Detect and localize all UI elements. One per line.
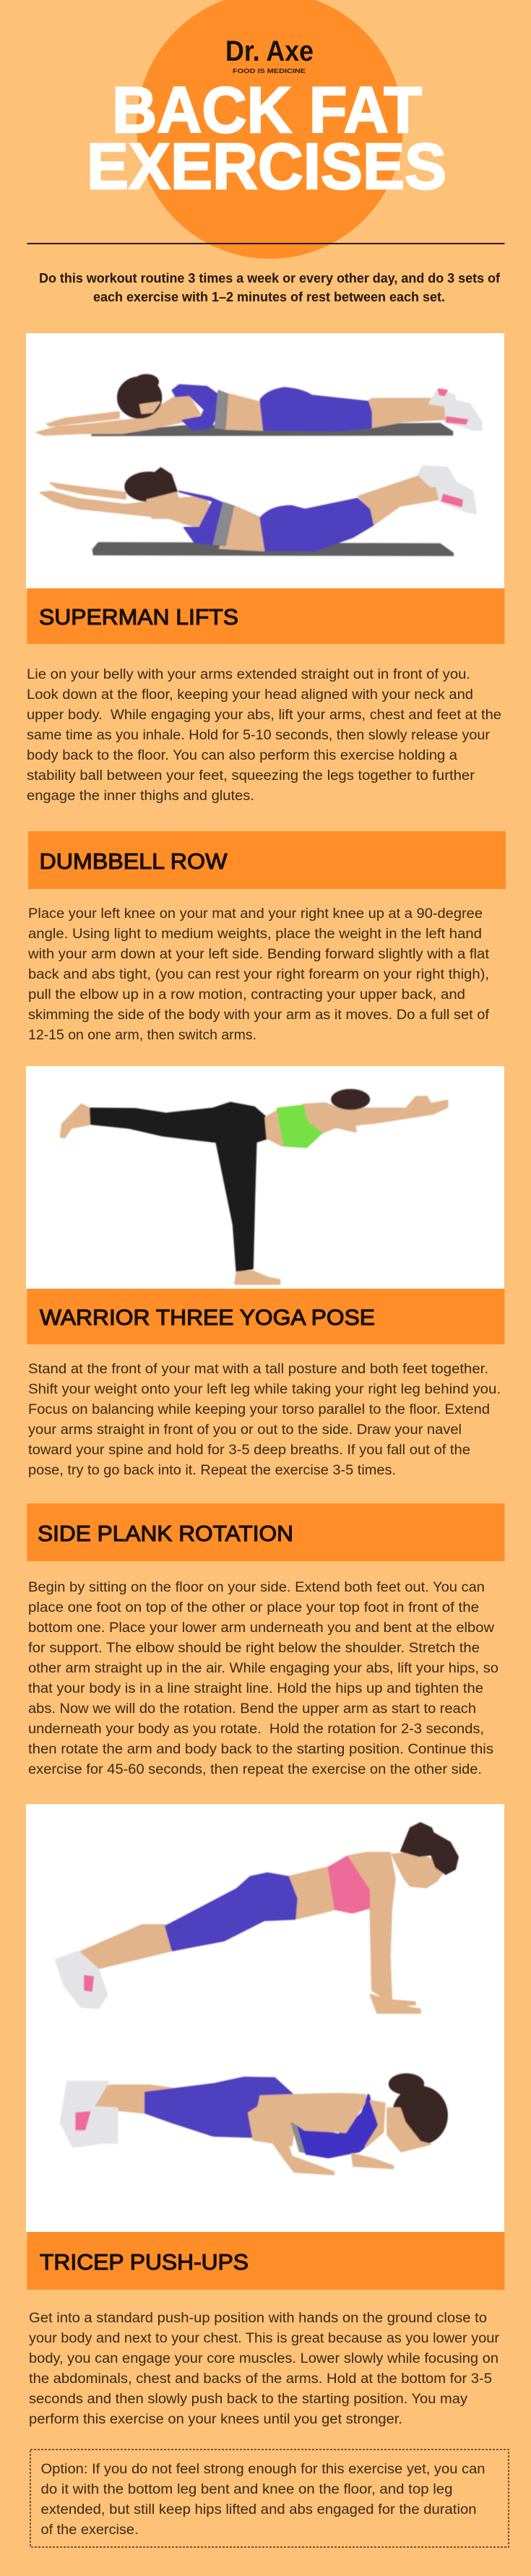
callout: option box: of the exercise.: [40, 2523, 139, 2538]
photo panel: warrior three: [26, 1066, 504, 1289]
callout: option box: do it with the bottom leg bent and knee on the floor, and top leg: [40, 2482, 452, 2497]
panel: side plank rotation: [27, 1503, 504, 1777]
text block: dumbbell row: [27, 906, 490, 1043]
text block: tricep push-ups: seconds and then slowly push back to the starting position. You may: [29, 2392, 468, 2407]
text block: side plank rotation: other arm straight up in the air. While engaging your abs, lift your hips, so: [28, 1661, 498, 1676]
heading banner: superman lifts: SUPERMAN LIFTS: [39, 604, 238, 630]
panel: warrior three yoga pose: [26, 1066, 504, 1478]
text block: side plank rotation: underneath your body as you rotate. Hold the rotation for 2-3 seconds,: [28, 1722, 484, 1737]
text block: side plank rotation: bottom one. Place your lower arm underneath you and bent at the elbow: [28, 1620, 494, 1636]
text block: warrior three: Shift your weight onto your left leg while taking your right leg behind you.: [28, 1382, 501, 1397]
figure: lying flat on mat: [38, 374, 481, 436]
text block: superman lifts: engage the inner thighs and glutes.: [27, 789, 254, 804]
text block: side plank rotation: that your body is in a line straight line. Hold the hips up and tighten the: [28, 1681, 483, 1696]
text block: warrior three: pose, try to go back into it. Repeat the exercise 3-5 times.: [28, 1463, 396, 1478]
text block: side plank rotation: abs. Now we will do the rotation. Bend the upper arm as start to reach: [28, 1701, 476, 1717]
header: logo, title and intro: [27, 0, 504, 304]
callout: option box: Option: If you do not feel strong enough for this exercise yet, you can: [40, 2462, 485, 2477]
heading banner: dumbbell row: DUMBBELL ROW: [39, 849, 228, 874]
figure: push-up top position: [56, 1823, 458, 2013]
callout: option box: extended, but still keep hips lifted and abs engaged for the duration: [40, 2502, 477, 2517]
text block: warrior three: Stand at the front of your mat with a tall posture and both feet together.: [28, 1362, 488, 1377]
heading banner: warrior three: WARRIOR THREE YOGA POSE: [40, 1305, 375, 1330]
text block: dumbbell row: angle. Using light to medium weights, place the weight in the left hand: [28, 927, 482, 942]
text block: tricep push-ups: body, you can engage your core muscles. Lower slowly while focusing on: [29, 2351, 498, 2366]
text block: side plank rotation: then rotate the arm and body back to the starting position. Continue this: [28, 1742, 493, 1757]
panel: superman lifts: [26, 333, 504, 804]
heading banner: tricep push-ups: [27, 2232, 504, 2290]
title: EXERCISES: [87, 131, 446, 203]
text block: dumbbell row: pull the elbow up in a row motion, contracting your upper back, and: [28, 987, 465, 1003]
logo: Dr. Axe: FOOD IS MEDICINE: [233, 67, 306, 74]
text block: dumbbell row: skimming the side of the body with your arm as it moves. Do a full set of: [28, 1008, 490, 1023]
orange circle behind title: [137, 0, 403, 259]
text block: side plank rotation: Begin by sitting on the floor on your side. Extend both feet out. You can: [28, 1580, 485, 1595]
intro text: Do this workout routine 3 times a week or every other day, and do 3 sets of: [39, 271, 501, 285]
text block: dumbbell row: back and abs tight, (you can rest your right forearm on your right thigh),: [28, 967, 489, 982]
text block: superman lifts: Look down at the floor, keeping your head aligned with your neck and: [27, 687, 473, 703]
heading banner: side plank rotation: [27, 1503, 504, 1561]
heading banner: superman lifts: [27, 588, 504, 644]
figure: push-up bottom position: [61, 2074, 447, 2174]
text block: superman lifts: Lie on your belly with your arms extended straight out in front of you.: [27, 667, 470, 682]
callout: option box: [30, 2450, 509, 2547]
photo panel: superman lifts: [26, 333, 504, 588]
text block: superman lifts: stability ball between your feet, squeezing the legs together to further: [27, 768, 475, 783]
figure: warrior three pose: [61, 1089, 447, 1284]
logo: Dr. Axe: Dr. Axe: [225, 35, 314, 67]
text block: side plank rotation: exercise for 45-60 seconds, then repeat the exercise on the other side.: [28, 1762, 482, 1777]
heading banner: dumbbell row: [28, 831, 506, 889]
text block: side plank rotation: [28, 1580, 498, 1777]
text block: superman lifts: same time as you inhale. Hold for 5-10 seconds, then slowly release your: [27, 728, 491, 743]
title: [87, 74, 446, 203]
panel: dumbbell row: [27, 831, 506, 1043]
text block: superman lifts: [27, 667, 501, 804]
heading banner: side plank rotation: SIDE PLANK ROTATION: [38, 1521, 293, 1546]
heading banner: tricep push-ups: TRICEP PUSH-UPS: [40, 2249, 249, 2275]
text block: tricep push-ups: Get into a standard push-up position with hands on the ground close to: [29, 2311, 487, 2326]
heading banner: warrior three: [27, 1289, 504, 1344]
text block: tricep push-ups: the abdominals, chest and backs of the arms. Hold at the bottom for 3-5: [29, 2371, 492, 2387]
intro text: each exercise with 1–2 minutes of rest between each set.: [93, 290, 445, 304]
photo panel: tricep push-ups: [26, 1804, 504, 2232]
text block: warrior three: toward your spine and hold for 3-5 deep breaths. If you fall out of the: [28, 1443, 470, 1458]
text block: warrior three: your arms straight in front of you or out to the side. Draw your navel: [28, 1422, 462, 1438]
text block: dumbbell row: with your arm down at your left side. Bending forward slightly with a flat: [27, 947, 490, 962]
title: BACK FAT: [112, 74, 422, 147]
text block: tricep push-ups: perform this exercise on your knees until you get stronger.: [29, 2412, 402, 2427]
text block: superman lifts: body back to the floor. You can also perform this exercise holding a: [27, 748, 457, 763]
text block: warrior three: Focus on balancing while keeping your torso parallel to the floor. Extend: [28, 1402, 490, 1417]
text block: dumbbell row: Place your left knee on your mat and your right knee up at a 90-degree: [28, 906, 483, 922]
text block: warrior three: [28, 1362, 501, 1478]
text block: dumbbell row: 12-15 on one arm, then switch arms.: [28, 1028, 256, 1043]
figure: arms and legs raised: [40, 466, 476, 556]
text block: tricep push-ups: your body and next to your chest. This is great because as you lower your: [29, 2331, 500, 2346]
panel: tricep push-ups: [26, 1804, 509, 2547]
text block: superman lifts: upper body. While engaging your abs, lift your arms, chest and feet at the: [27, 708, 501, 723]
text block: side plank rotation: for support. The elbow should be right below the shoulder. Stretch the: [28, 1641, 480, 1656]
intro text: [39, 271, 501, 304]
text block: side plank rotation: place one foot on top of the other or place your top foot in front of the: [28, 1600, 479, 1615]
text block: tricep push-ups: [29, 2311, 500, 2427]
